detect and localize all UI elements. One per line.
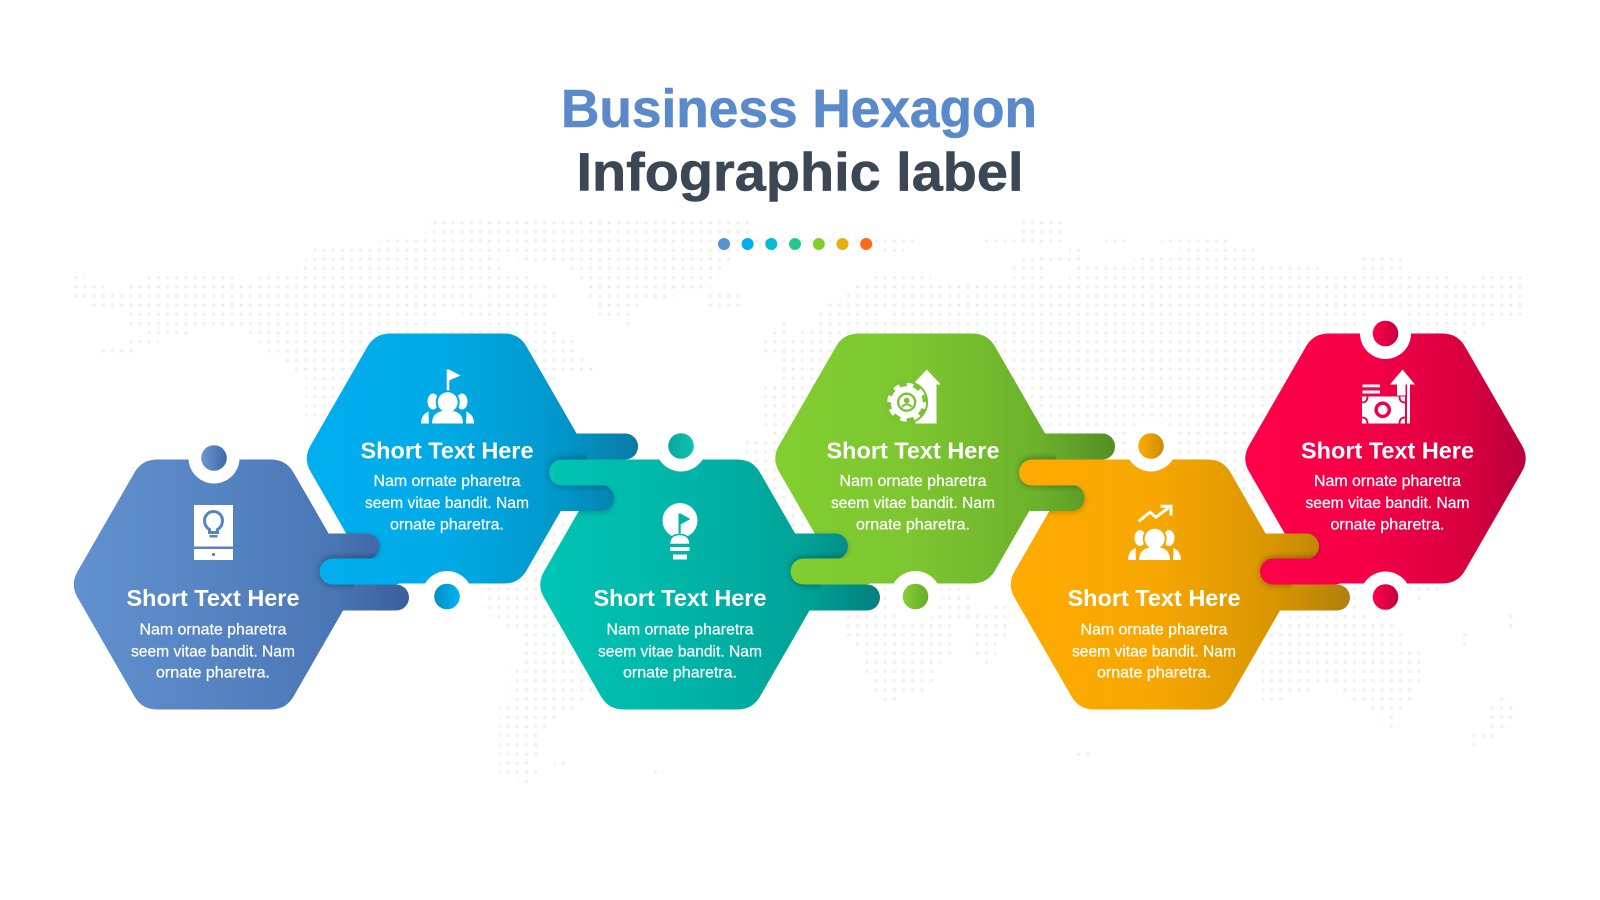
heading: Short Text Here (1068, 585, 1240, 611)
teal notch with dot (656, 420, 706, 472)
decorative colour dot row (718, 238, 872, 250)
body text: ornate pharetra. (390, 516, 504, 534)
body text: Nam ornate pharetra (606, 622, 754, 638)
body text (598, 622, 762, 682)
cyan notch with dot (422, 571, 472, 622)
panel: orange hexagon (1011, 420, 1350, 710)
connector tab: red over orange (1260, 558, 1348, 584)
green tab shadow on orange (1048, 486, 1088, 515)
icon: tablet with light bulb (194, 505, 233, 560)
orange connector shadow on red tab (1260, 556, 1330, 586)
body text (365, 473, 529, 534)
body text: seem vitae bandit. Nam (365, 495, 529, 512)
title (561, 79, 1037, 202)
panel: red hexagon (1245, 308, 1526, 622)
dotted world map background (73, 218, 1527, 786)
body text: Nam ornate pharetra (1314, 473, 1461, 490)
body text (1072, 622, 1236, 682)
teal connector shadow on green (791, 556, 861, 586)
connector tab: teal over cyan (549, 460, 641, 486)
orange tab shadow on red (1284, 532, 1322, 558)
cyan tab shadow on teal (577, 487, 616, 515)
body text (131, 622, 295, 682)
body text: seem vitae bandit. Nam (1072, 644, 1236, 660)
title: Business Hexagon (561, 79, 1037, 139)
body text: Nam ornate pharetra (1080, 622, 1228, 638)
heading: Short Text Here (360, 438, 534, 464)
blue notch with dot (188, 432, 240, 484)
cyan left tab shadow (320, 556, 390, 586)
heading: Short Text Here (826, 438, 1000, 464)
connector tab: cyan over blue (320, 558, 408, 584)
body text: seem vitae bandit. Nam (1306, 495, 1470, 512)
body text: ornate pharetra. (623, 665, 737, 682)
body text: seem vitae bandit. Nam (131, 644, 295, 660)
body text: Nam ornate pharetra (374, 473, 521, 490)
body text: ornate pharetra. (156, 665, 270, 682)
icon: light bulb with flag (662, 503, 698, 560)
body text (1306, 473, 1470, 534)
panel: cyan hexagon (307, 334, 638, 622)
teal tab shadow on green (814, 532, 850, 558)
red notch bottom with dot (1360, 572, 1411, 622)
body text: ornate pharetra. (1097, 665, 1211, 682)
body text: Nam ornate pharetra (140, 622, 287, 638)
panel: blue hexagon (74, 432, 409, 710)
panel: green hexagon (775, 334, 1115, 622)
connector tab: green over teal (790, 558, 878, 584)
orange notch with dot (1126, 420, 1176, 472)
red notch top with dot (1360, 308, 1411, 359)
body text: seem vitae bandit. Nam (831, 495, 995, 512)
green connector shadow on orange tab (1019, 457, 1089, 487)
icon: team with flag (421, 370, 474, 424)
body text: Nam ornate pharetra (840, 473, 987, 490)
green notch with dot (890, 571, 941, 622)
body text: ornate pharetra. (856, 516, 970, 534)
icon: money with up arrow (1362, 370, 1415, 424)
heading: Short Text Here (594, 585, 766, 611)
body text: seem vitae bandit. Nam (598, 644, 762, 660)
body text: ornate pharetra. (1331, 516, 1444, 534)
heading: Short Text Here (126, 585, 300, 611)
title: Infographic label (576, 142, 1024, 202)
connector tab: orange over green (1019, 460, 1111, 486)
icon: gear with up arrow (885, 370, 941, 424)
teal left tab shadow (549, 457, 619, 487)
heading: Short Text Here (1301, 438, 1474, 464)
icon: team with growth arrow (1128, 506, 1181, 560)
blue tab shadow on cyan (346, 532, 382, 558)
panel: teal hexagon (540, 420, 880, 710)
body text (831, 473, 995, 534)
